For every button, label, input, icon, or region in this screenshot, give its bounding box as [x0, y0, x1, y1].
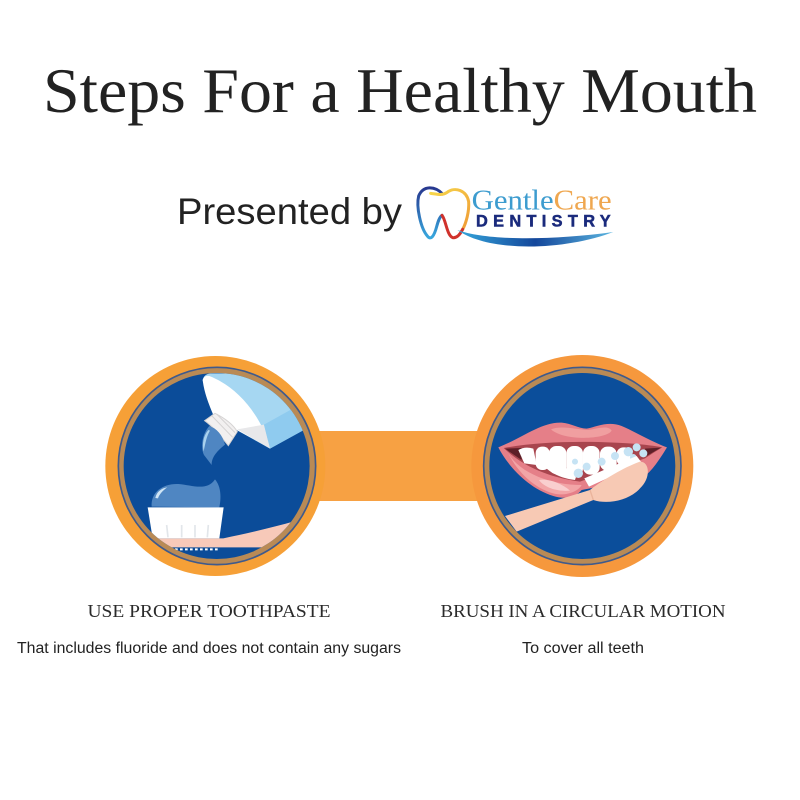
paste on brush: [152, 479, 221, 507]
connector band: [300, 431, 500, 501]
foam: [572, 443, 647, 478]
teeth: [518, 446, 631, 480]
text: step 1 description: That includes fluoride and does not contain any sugars: [17, 640, 401, 657]
blue disc: [124, 373, 310, 559]
title: Steps For a Healthy Mouth: [43, 56, 757, 126]
toothbrush handle: [158, 522, 291, 548]
falling paste: [202, 426, 225, 465]
heading: step 2: BRUSH IN A CIRCULAR MOTION: [440, 601, 726, 621]
lips: [498, 423, 667, 498]
bristles: [148, 507, 224, 538]
mouth interior: [504, 442, 662, 482]
lower lip inner: [508, 453, 582, 494]
circle: toothpaste: [105, 356, 325, 576]
toothbrush: [505, 462, 648, 532]
blue disc: [489, 373, 675, 559]
brush bristles: [584, 456, 642, 487]
upper lip highlight: [551, 427, 612, 438]
brown ring: [118, 367, 316, 565]
orange ring: [105, 356, 325, 576]
orange ring: [471, 355, 693, 577]
circle: brushing: [471, 355, 693, 577]
logo: GentleCare Dentistry: [418, 184, 613, 246]
logo wordmark top: GentleCare: [472, 184, 612, 216]
logo swoosh: [457, 230, 613, 246]
text: step 2 description: To cover all teeth: [522, 640, 644, 657]
bristle base dashes: [175, 548, 218, 550]
logo wordmark bottom: DENTISTRY: [476, 213, 611, 231]
toothpaste tube: [202, 373, 303, 449]
brown ring: [484, 367, 681, 565]
heading: step 1: USE PROPER TOOTHPASTE: [88, 601, 330, 621]
presented by text: Presented by: [177, 191, 403, 232]
logo tooth icon: [418, 188, 469, 238]
